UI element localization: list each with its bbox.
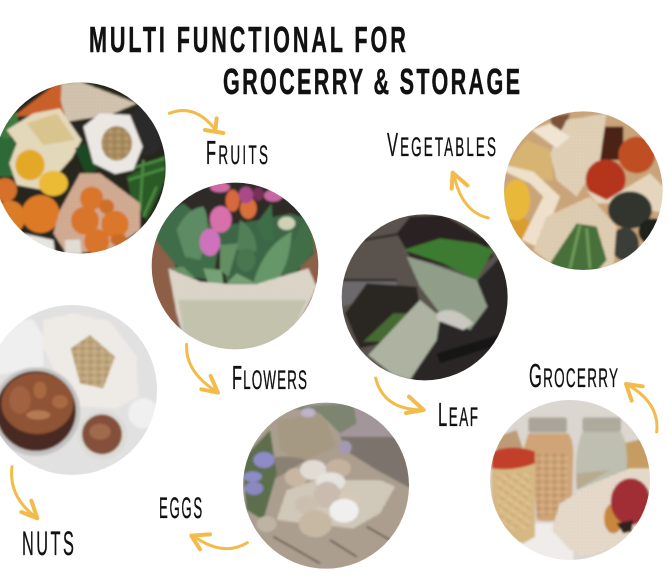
arrow: flowers to leaf side [187, 344, 218, 393]
photo: vegetables in mesh bags [502, 108, 668, 273]
title: MULTI FUNCTIONAL FOR [89, 20, 406, 60]
title: GROCERRY & STORAGE [223, 62, 520, 102]
title [89, 20, 520, 102]
arrow: fruits to flowers [169, 111, 223, 133]
label: nuts: NUTS [22, 524, 74, 563]
photo: grocery jars and mesh bag [487, 397, 653, 563]
arrow: vegetables [452, 173, 488, 218]
label: flowers: FLOWERS [232, 359, 307, 397]
label: leaf: LEAF [438, 396, 478, 434]
arrow: nuts [12, 467, 37, 518]
label: grocery: GROCERRY [529, 357, 618, 395]
photo: nuts in bowl, jar and mesh bag [0, 303, 160, 477]
photo: leaf greens in mesh bags [338, 212, 512, 385]
label: vegetables: VEGETABLES [387, 126, 496, 164]
label: fruits: FRUITS [206, 134, 268, 172]
label: eggs: EGGS [159, 491, 202, 524]
arrow: grocery [626, 384, 657, 432]
photo: tulips in mesh bag [150, 180, 322, 352]
arrow: eggs [191, 534, 247, 549]
photo: fruits in mesh bags [0, 80, 170, 257]
photo: eggs in mesh bag on wooden table [240, 400, 413, 573]
arrow: leaf [376, 378, 424, 413]
